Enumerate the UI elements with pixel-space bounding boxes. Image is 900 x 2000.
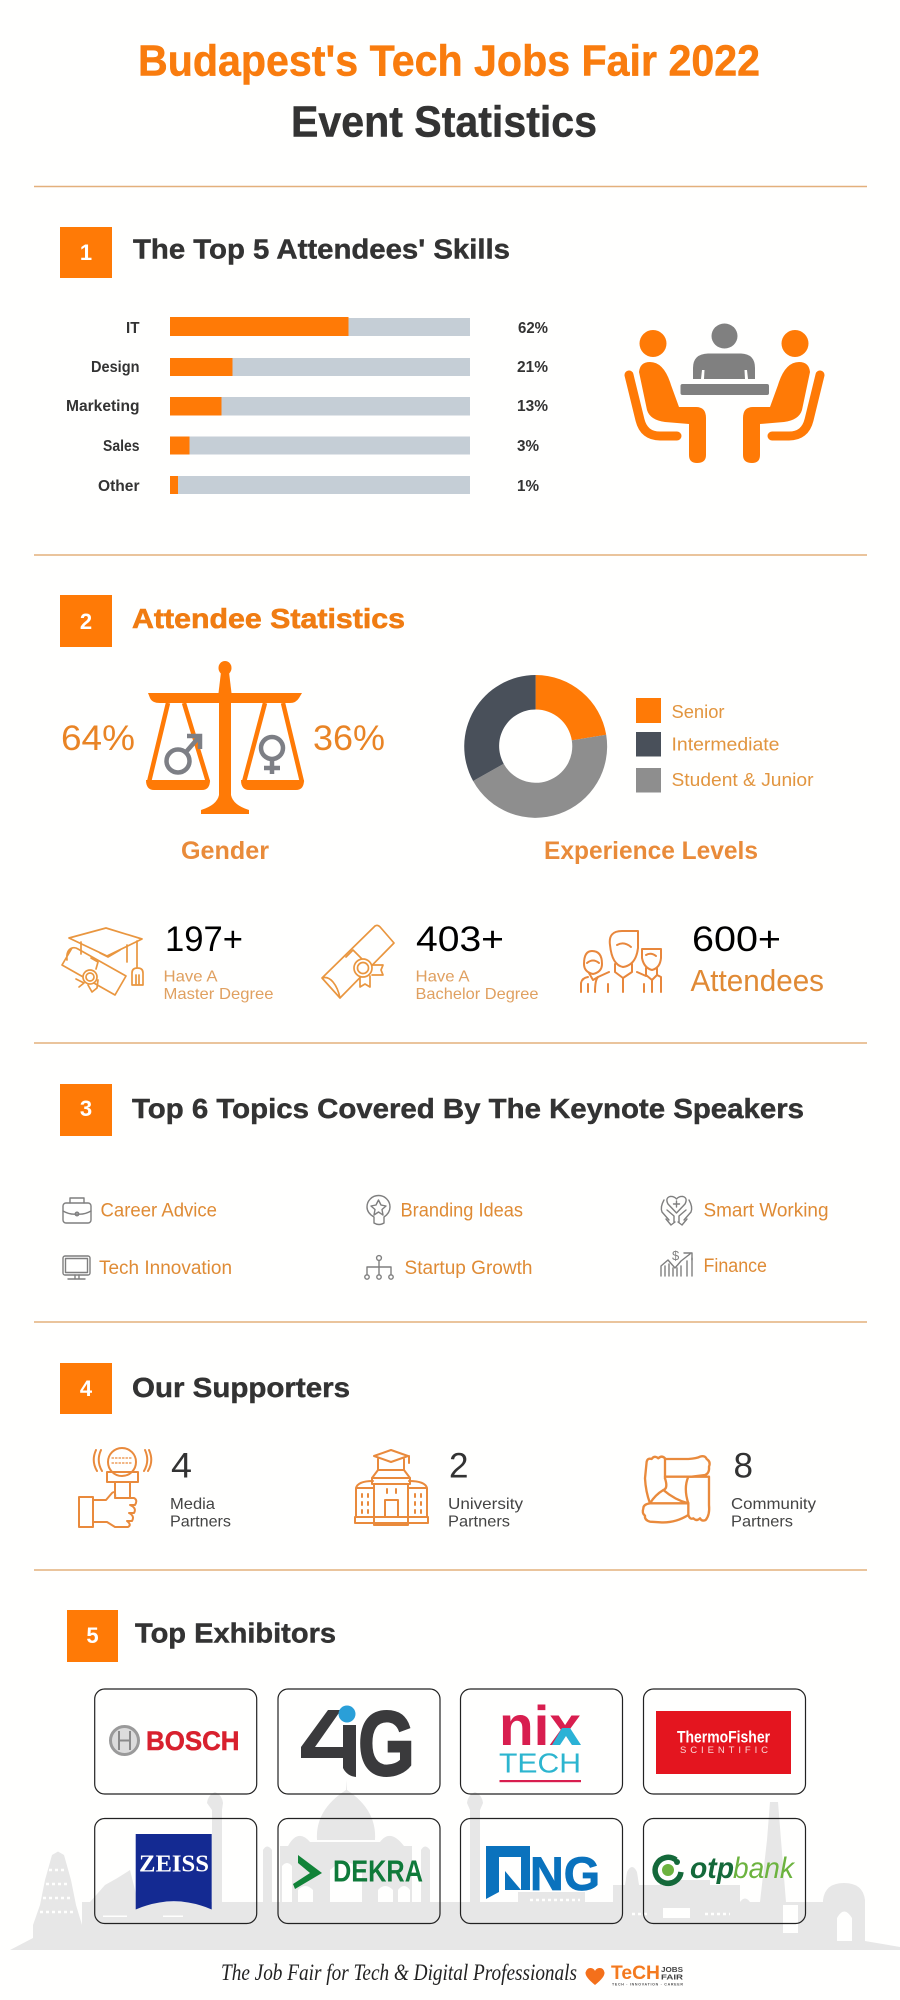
section 2 badge: 2: [80, 609, 92, 634]
section 1 badge: [60, 227, 112, 278]
stat: bachelor degree: [322, 920, 539, 1003]
stat: community partners: Community: [731, 1496, 816, 1513]
bar chart: skills: 3%: [517, 438, 539, 455]
title: Event Statistics: [291, 98, 597, 146]
stat: bachelor degree: 403+: [416, 920, 504, 959]
bar chart: skills: 13%: [517, 398, 548, 415]
stat: master degree: [62, 920, 274, 1003]
logo: OTP bank: bank: [733, 1852, 796, 1885]
bar chart: skills: 21%: [517, 359, 548, 376]
legend: [636, 698, 814, 792]
experience label: Experience Levels: [544, 837, 758, 865]
stat: master degree: 197+: [165, 920, 243, 959]
section 2 badge: [60, 595, 112, 647]
icon: male sign: [166, 736, 200, 772]
icon: interlocked hands: [643, 1456, 710, 1522]
icon: gender scales: [146, 661, 304, 814]
topic: tech innovation: Tech Innovation: [99, 1258, 232, 1279]
logo: OTP bank: otp: [690, 1852, 734, 1885]
stat: media partners: Media: [170, 1496, 215, 1513]
icon: meeting: [629, 324, 820, 463]
topic: branding ideas: [367, 1196, 523, 1224]
stat: master degree: Master Degree: [164, 986, 274, 1003]
section 4 heading: Our Supporters: [132, 1372, 350, 1403]
logo: Tech Jobs Fair: TECH · INNOVATION · CAREER: [612, 1982, 683, 1986]
section 5 heading: Top Exhibitors: [135, 1618, 336, 1648]
stat: media partners: Partners: [170, 1514, 231, 1530]
donut chart: experience levels: [464, 675, 607, 818]
legend: Intermediate: [672, 734, 780, 754]
gender percentages: 36%: [313, 719, 385, 758]
stat: media partners: 4: [171, 1446, 192, 1486]
stat: attendees: 600+: [692, 920, 781, 959]
stat: bachelor degree: Have A: [416, 968, 470, 986]
icon: light bulb: [367, 1196, 390, 1224]
logo: nix tech: [460, 1689, 622, 1794]
topic: career advice: Career Advice: [100, 1200, 217, 1222]
stat: attendees: Attendees: [690, 963, 824, 998]
topic: branding ideas: Branding Ideas: [400, 1200, 523, 1222]
topic: startup growth: Startup Growth: [404, 1258, 532, 1279]
logo: Bosch: [95, 1689, 257, 1794]
bar chart: skills: Marketing: [66, 398, 140, 415]
logo: Dekra: [278, 1818, 440, 1924]
stat: university partners: [355, 1446, 523, 1530]
section 2 heading: Attendee Statistics: [132, 603, 405, 634]
section 3 badge: 3: [80, 1096, 92, 1121]
title: [138, 36, 760, 146]
bar chart: skills: 62%: [518, 320, 548, 337]
icon: graduation cap: [62, 928, 143, 995]
logo: Tech Jobs Fair: [611, 1963, 683, 1986]
logo: Thermo Fisher: [644, 1689, 806, 1794]
section 4 badge: 4: [80, 1376, 93, 1401]
icon: briefcase: [63, 1198, 91, 1223]
section 4 badge: [60, 1363, 112, 1414]
logo: OTP bank: [644, 1818, 806, 1924]
background skyline: [10, 1780, 900, 1950]
logo: NNG: NG: [530, 1847, 600, 1900]
topic: finance: [661, 1248, 767, 1277]
panel: supporters: [60, 1363, 816, 1530]
bar chart: skills: Design: [91, 359, 140, 376]
logo: 4iG: [278, 1689, 440, 1795]
icon: people group: [581, 931, 661, 992]
topic: startup growth: [365, 1256, 532, 1279]
bar chart: skills: Other: [98, 478, 140, 495]
logo: Tech Jobs Fair: FAIR: [661, 1974, 683, 1982]
icon: hands and heart: [661, 1196, 692, 1225]
stat: bachelor degree: Bachelor Degree: [416, 986, 539, 1003]
section 3 heading: Top 6 Topics Covered By The Keynote Speakers: [132, 1093, 804, 1124]
footer tagline: The Job Fair for Tech & Digital Professionals: [221, 1960, 577, 1985]
panel: attendee statistics: [60, 595, 824, 1003]
logo: Bosch: BOSCH: [146, 1726, 240, 1756]
logo: Thermo Fisher: SCIENTIFIC: [680, 1745, 768, 1756]
icon: org chart: [365, 1256, 393, 1279]
section 5 badge: [67, 1610, 118, 1662]
stat: university partners: Partners: [448, 1514, 510, 1530]
icon: diploma: [322, 925, 394, 998]
bar chart: skills: [66, 317, 548, 495]
stat: media partners: [79, 1446, 231, 1530]
gender percentages: 64%: [61, 719, 135, 758]
stat: university partners: University: [448, 1496, 523, 1513]
icon: female sign: [261, 737, 283, 774]
legend: Senior: [672, 701, 724, 722]
topic: finance: Finance: [704, 1256, 767, 1277]
section 1 badge: 1: [80, 240, 92, 265]
bar chart: skills: 1%: [517, 478, 539, 495]
title: Budapest's Tech Jobs Fair 2022: [138, 36, 760, 86]
panel: top exhibitors: [67, 1610, 806, 1924]
stat: master degree: Have A: [164, 968, 218, 986]
stat: community partners: [643, 1446, 816, 1530]
logo: nix tech: TECH: [499, 1748, 581, 1778]
logo: Tech Jobs Fair: TeCH: [611, 1963, 660, 1984]
bar chart: skills: Sales: [103, 438, 140, 455]
topic: career advice: [63, 1198, 217, 1223]
icon: heart: [585, 1968, 605, 1985]
section 1 heading: The Top 5 Attendees' Skills: [133, 234, 510, 264]
bar chart: skills: IT: [126, 320, 140, 337]
logo: 4iG: G: [358, 1693, 415, 1795]
icon: growth chart: $: [672, 1248, 680, 1263]
icon: microphone in hand: [79, 1448, 151, 1527]
stat: community partners: Partners: [731, 1514, 793, 1530]
gender percentages: [61, 719, 385, 758]
logo: Zeiss: [95, 1818, 257, 1924]
logo: Zeiss: ZEISS: [139, 1852, 209, 1878]
panel: keynote topics: [60, 1084, 828, 1279]
stat: attendees: [581, 920, 824, 998]
icon: university building: [355, 1450, 428, 1525]
topic: smart working: Smart Working: [704, 1200, 828, 1222]
logo: Thermo Fisher: ThermoFisher: [677, 1728, 770, 1746]
section 3 badge: [60, 1084, 112, 1136]
logo: Dekra: DEKRA: [333, 1854, 423, 1888]
stat: community partners: 8: [734, 1446, 753, 1486]
stat: university partners: 2: [449, 1446, 468, 1486]
logo: NNG: [460, 1818, 622, 1924]
logo: nix tech: nix: [499, 1694, 581, 1757]
icon: monitor: [63, 1256, 90, 1279]
section 5 badge: 5: [86, 1623, 99, 1648]
topic: smart working: [661, 1196, 828, 1225]
gender label: Gender: [181, 837, 269, 865]
logo: Tech Jobs Fair: JOBS: [661, 1967, 683, 1974]
panel: attendee skills: [60, 227, 820, 495]
legend: Student & Junior: [672, 769, 814, 790]
